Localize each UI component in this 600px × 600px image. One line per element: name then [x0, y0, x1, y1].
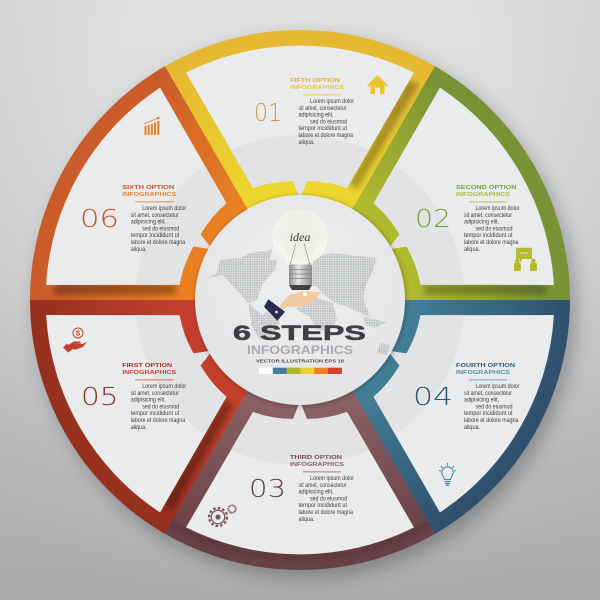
text block: first option: sed do eiusmod: [142, 403, 179, 410]
text block: first option: [122, 363, 187, 431]
text block: fifth option: adipisicing elit,: [298, 112, 334, 119]
caption: VECTOR ILLUSTRATION EPS 10: [256, 358, 345, 363]
number 03: 03: [249, 474, 286, 503]
text block: second option: sit amet, consectetur: [464, 212, 513, 219]
text block: sixth option: SIXTH OPTION: [122, 185, 174, 191]
text block: fourth option: adipisicing elit,: [464, 397, 499, 404]
text block: second option: tempor incididunt ut: [464, 232, 513, 239]
text block: sixth option: Lorem ipsum dolor: [142, 205, 187, 212]
text block: third option: labore et dolore magna: [298, 509, 353, 516]
text block: sixth option: labore et dolore magna: [131, 239, 185, 246]
text block: second option: Lorem ipsum dolor: [476, 205, 520, 212]
text block: third option: THIRD OPTION: [290, 455, 342, 461]
colour legend bar: [259, 368, 342, 374]
text block: fifth option: [290, 78, 355, 146]
text block: fifth option: sit amet, consectetur: [298, 105, 347, 112]
text block: second option: INFOGRAPHICS: [456, 192, 510, 198]
text block: first option: adipisicing elit,: [131, 397, 166, 404]
number 01: 01: [254, 98, 282, 127]
text block: second option: SECOND OPTION: [456, 185, 516, 191]
icon: gears: [209, 505, 236, 526]
text block: sixth option: INFOGRAPHICS: [122, 192, 176, 198]
text block: first option: tempor incididunt ut: [131, 410, 179, 417]
icon: house: [367, 75, 388, 94]
text block: fifth option: aliqua.: [298, 139, 315, 146]
icon: open hand holding bulb: [264, 291, 322, 321]
number 02: 02: [415, 204, 451, 233]
panel: sixth option, orange: [30, 66, 248, 300]
text block: sixth option: aliqua.: [131, 246, 147, 253]
icon: hand with dollar coin: $: [76, 329, 81, 338]
panel: second option, green: [352, 66, 570, 300]
text block: first option: FIRST OPTION: [122, 363, 172, 369]
text block: fourth option: INFOGRAPHICS: [456, 370, 510, 376]
text block: third option: [290, 455, 355, 523]
panel: fifth option, yellow: [165, 30, 435, 209]
text block: first option: INFOGRAPHICS: [122, 370, 176, 376]
text block: first option: aliqua.: [131, 424, 147, 431]
text block: first option: labore et dolore magna: [131, 417, 185, 424]
text block: third option: INFOGRAPHICS: [290, 462, 344, 468]
text block: fourth option: tempor incididunt ut: [464, 410, 513, 417]
text block: third option: Lorem ipsum dolor: [310, 475, 355, 482]
text block: fourth option: sed do eiusmod: [476, 403, 513, 410]
icon: light bulb with idea: idea: [290, 230, 310, 244]
text block: fifth option: FIFTH OPTION: [290, 78, 340, 84]
text block: first option: sit amet, consectetur: [131, 390, 179, 397]
panel: first option, red: [30, 300, 248, 534]
text block: sixth option: sed do eiusmod: [142, 225, 179, 232]
text block: first option: Lorem ipsum dolor: [142, 383, 187, 390]
text block: sixth option: adipisicing elit,: [131, 219, 166, 226]
text block: third option: sit amet, consectetur: [298, 482, 347, 489]
panel: third option, mauve: [165, 391, 435, 570]
text block: fourth option: [456, 363, 520, 431]
text block: fifth option: Lorem ipsum dolor: [310, 98, 355, 105]
title: 6 STEPS: [233, 322, 366, 345]
icon: two people with speech bubble: [514, 248, 537, 271]
number 04: 04: [413, 382, 453, 411]
panel: fourth option, blue: [352, 300, 570, 534]
text block: second option: labore et dolore magna: [464, 239, 519, 246]
text block: fourth option: labore et dolore magna: [464, 417, 519, 424]
icon: light bulb: [439, 463, 456, 485]
text block: fifth option: INFOGRAPHICS: [290, 85, 344, 91]
text block: fifth option: sed do eiusmod: [310, 118, 347, 125]
text block: third option: aliqua.: [298, 516, 315, 523]
text block: second option: aliqua.: [464, 246, 480, 253]
text block: sixth option: tempor incididunt ut: [131, 232, 179, 239]
text block: third option: sed do eiusmod: [310, 495, 347, 502]
text block: second option: [456, 185, 520, 253]
text block: fourth option: FOURTH OPTION: [456, 363, 515, 369]
subtitle: INFOGRAPHICS: [247, 345, 353, 357]
text block: third option: tempor incididunt ut: [298, 502, 347, 509]
icon: growth bar chart: [144, 117, 160, 135]
number 06: 06: [80, 204, 119, 233]
text block: third option: adipisicing elit,: [298, 489, 334, 496]
text block: sixth option: sit amet, consectetur: [131, 212, 179, 219]
text block: fourth option: Lorem ipsum dolor: [476, 383, 520, 390]
text block: second option: adipisicing elit,: [464, 219, 499, 226]
icon: hand with dollar coin: [63, 328, 87, 352]
text block: fifth option: tempor incididunt ut: [298, 125, 347, 132]
icon: light bulb with idea: [272, 209, 328, 290]
number 05: 05: [81, 382, 118, 411]
text block: fifth option: labore et dolore magna: [298, 132, 353, 139]
text block: sixth option: [122, 185, 187, 253]
world map dots: [207, 250, 390, 355]
text block: fourth option: sit amet, consectetur: [464, 390, 513, 397]
center circle: [194, 194, 408, 408]
text block: fourth option: aliqua.: [464, 424, 480, 431]
text block: second option: sed do eiusmod: [476, 225, 513, 232]
